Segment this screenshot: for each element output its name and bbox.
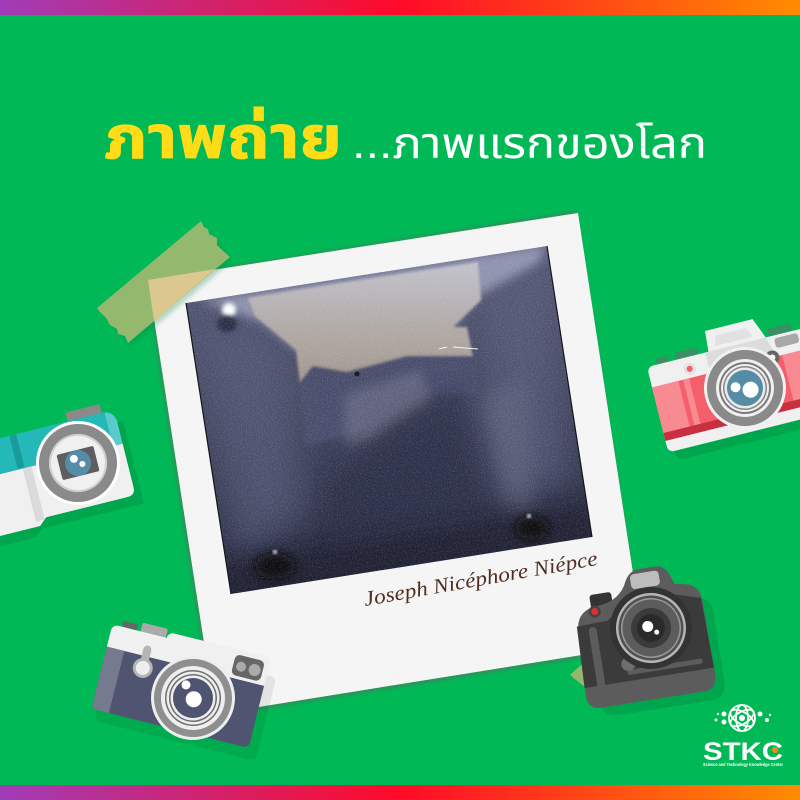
light pink side panel [652,381,692,441]
shutter lamp [682,362,697,376]
plate base tone [186,246,592,594]
logo wordmark: STKC [703,738,783,766]
lens highlight small [654,629,660,635]
left wall haze [210,346,311,554]
lens light ring [154,659,232,737]
tape strip [97,221,230,343]
camera: pink film camera [642,297,800,462]
camera shadow [0,421,145,555]
bottom rail [627,658,703,675]
lens glass [62,447,94,479]
top gradient bar [0,0,800,15]
lens silver ring [611,588,691,668]
camera shadow [95,637,276,761]
hot shoe button [589,592,613,609]
camera body top [647,319,800,452]
top-left dark spot [217,316,237,332]
dark building mass [342,386,466,484]
lens gray ring [699,342,791,434]
lens dark ring [614,591,688,665]
plate edge line [186,246,592,594]
lens ring thin [718,361,772,415]
lens outer [604,581,698,675]
lens ring white [716,359,774,417]
lens highlight small [79,460,86,468]
viewfinder housing [231,654,265,682]
caption: signature: Joseph Nicéphore Niépce [362,546,599,611]
body top left [105,624,171,668]
lens outer [695,338,795,438]
lens [604,581,698,675]
lens ring white inner [720,363,770,413]
top buttons [655,323,792,366]
lens ring dark [159,664,227,732]
lens highlight large [69,454,79,464]
lens [695,338,795,438]
top-left glare [222,303,236,317]
viewfinder hump [703,317,768,356]
lens mid ring [618,595,684,661]
polaroid frame [146,211,644,717]
lens highlight small [181,679,191,690]
camera shadow [654,323,800,461]
navy body [91,647,264,748]
scratch mark [439,347,478,349]
selector dial [764,349,781,366]
bottom-right dark spot [515,516,549,540]
lens gray ring [31,416,125,510]
buildings below sky [300,357,480,445]
lens outer [27,412,129,514]
lens highlight large [641,620,654,633]
black button [122,621,138,630]
body crease [23,466,45,522]
viewfinder left [235,661,247,673]
bottom shadow [225,505,595,600]
plate blemish [354,372,360,376]
title remainder: white words: ...ภาพแรกของโลก [352,120,707,168]
bottom-right glint [527,514,531,518]
dark mid band [572,587,714,688]
body top right [160,632,271,693]
pink body band [652,339,800,441]
grip strip [588,627,606,693]
tape overlap on polaroid [148,269,215,321]
title [104,104,707,171]
right light pink panel [782,339,800,408]
lens highlight small [729,381,742,393]
lens thin ring [617,594,685,662]
lens gray ring [146,651,240,745]
lower right light cone [480,380,532,516]
camera: navy rangefinder camera [89,616,281,761]
dark sensor box [56,446,100,480]
lens ring dark [713,356,777,420]
logo: STKC [703,705,783,767]
lens thin ring [44,429,112,497]
selector dial center [769,354,776,361]
lens ring light [710,353,780,423]
central courtyard haze [345,370,432,445]
viewfinder window [629,570,660,590]
top button [65,404,102,424]
camera: dark dslr camera [568,559,727,720]
gray plate behind lens [705,336,779,376]
viewfinder right [247,663,262,677]
bottom-left dark spot [255,553,295,579]
lens highlight large [184,690,203,709]
tape shadow [100,225,232,347]
lens [27,412,129,514]
camera shadow [586,596,727,718]
small release knob [620,656,636,672]
dark red strip [663,385,800,441]
lavender sky band [200,244,547,352]
key wheel [131,656,155,680]
side button [0,455,1,476]
logo orange dot [772,747,778,753]
lens inner barrel [628,605,674,651]
lens ring thin [164,669,222,727]
panel strip [683,378,702,433]
masking tape [97,221,232,347]
viewfinder window [713,327,753,346]
key wheel center [134,659,151,676]
body silhouette [568,560,717,710]
lens glass [635,612,667,644]
camera: teal compact camera [0,399,145,555]
red lamp [591,608,599,616]
dial [140,623,168,640]
light side panel [91,647,124,713]
lens [142,647,244,749]
historic photograph plate [180,240,600,600]
teal highlight [105,411,123,446]
bottom gradient bar [0,785,800,800]
lens inner [43,428,113,498]
window pill [774,333,800,348]
lens ring white inner [166,671,220,725]
bright sky [248,262,481,383]
lens glass [169,674,217,722]
teal top [0,410,123,487]
polaroid shadow [146,211,644,717]
lens outer [142,647,244,749]
red lamp housing [588,605,602,618]
right wall haze [486,296,576,500]
lens ring white [161,666,225,730]
key stem [140,645,152,666]
logo dots [714,712,771,724]
polaroid card [148,213,644,714]
lens glass [723,366,767,410]
logo tagline: Science and Technology Knowledge Center [703,762,783,767]
small tape scrap under dslr camera [570,664,586,688]
surface grain [180,240,600,600]
teal separator [9,434,24,469]
title highlight: yellow word: ภาพถ่าย [104,104,342,171]
lens highlight large [741,380,760,399]
shutter lamp dot [686,365,693,372]
bottom-left glint [273,550,277,554]
logo atom icon [728,705,756,731]
white body [0,443,137,545]
